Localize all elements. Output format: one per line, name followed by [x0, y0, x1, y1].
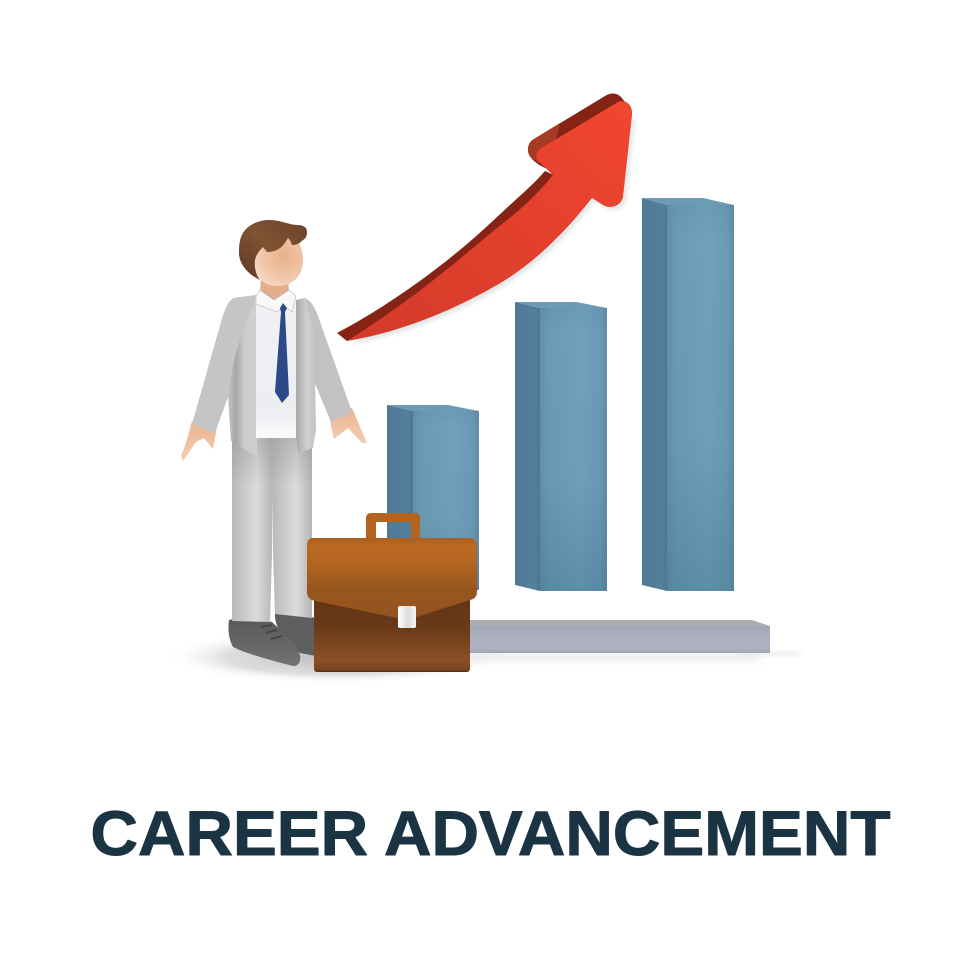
collar	[256, 290, 296, 312]
arrow head highlight	[528, 123, 560, 163]
arrow dark side	[337, 171, 556, 341]
handle	[366, 513, 420, 540]
tie	[275, 303, 289, 403]
arrow front face	[347, 101, 632, 341]
briefcase	[307, 513, 477, 672]
jacket body	[228, 298, 316, 457]
neck	[260, 275, 289, 304]
case body	[314, 590, 470, 672]
ground shadow	[165, 630, 800, 684]
chart base platform	[462, 620, 770, 653]
bar: shortest	[387, 405, 479, 590]
clasp	[398, 606, 416, 628]
shirt	[256, 300, 296, 438]
head	[239, 220, 307, 286]
title: CAREER ADVANCEMENT	[90, 799, 890, 869]
flap	[307, 538, 477, 620]
person	[181, 220, 367, 666]
bar: middle	[515, 302, 607, 591]
shoes	[228, 613, 316, 666]
trousers	[232, 436, 312, 622]
arrow head dark side	[528, 93, 626, 168]
arrow shadow	[350, 118, 635, 344]
arrow: rising red arrow	[337, 93, 635, 344]
bar chart	[387, 198, 734, 591]
sleeves	[192, 295, 352, 433]
hands	[181, 408, 367, 461]
hair	[239, 220, 307, 280]
bar: tallest	[642, 198, 734, 591]
